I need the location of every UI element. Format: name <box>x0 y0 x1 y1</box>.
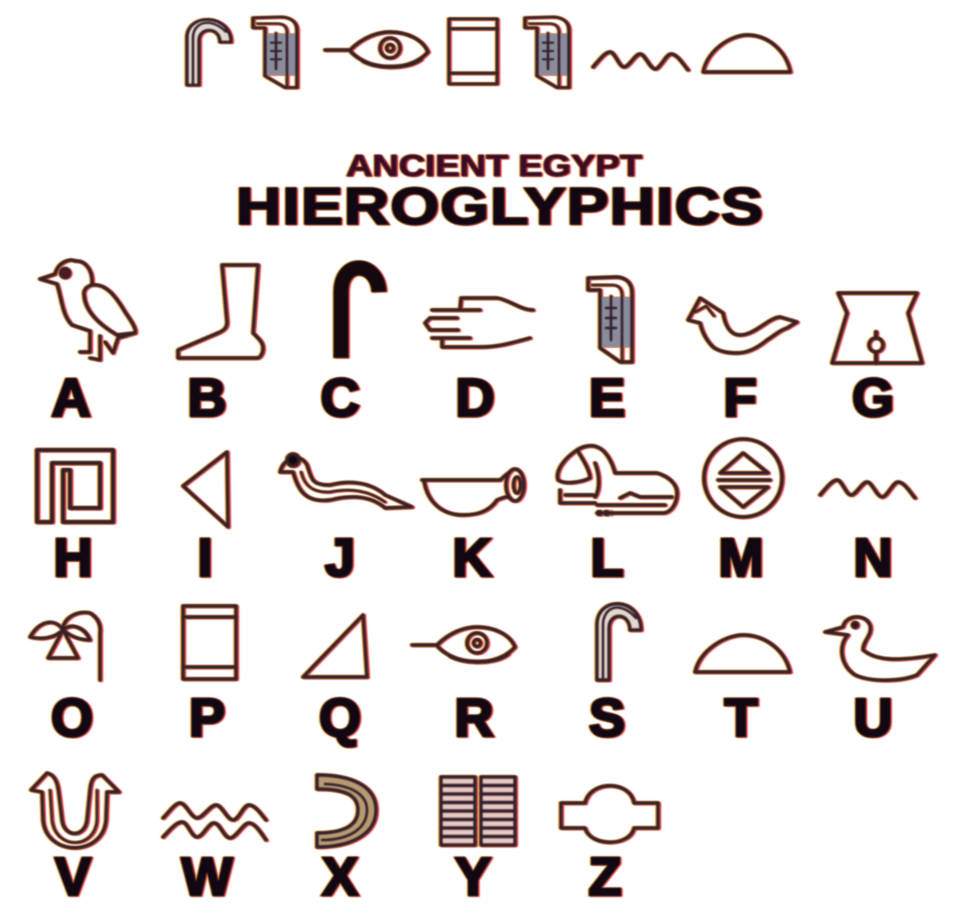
icon: top folded cloth E second <box>525 17 569 88</box>
letter J: J <box>325 528 355 588</box>
icon: water line N <box>820 480 915 498</box>
subtitle: ancient egypt: ANCIENT EGYPT <box>346 148 642 183</box>
letter M: M <box>719 528 763 588</box>
icon: circle with diamonds M <box>704 439 782 517</box>
letter A: A <box>52 368 90 428</box>
letter V: V <box>55 847 91 907</box>
letter B: B <box>188 368 226 428</box>
letter Z: Z <box>588 847 622 907</box>
title <box>236 148 764 236</box>
alphabet row 3 <box>30 604 935 748</box>
letter F: F <box>724 368 756 428</box>
icon: spiral H <box>37 450 113 522</box>
letter X: X <box>322 847 358 907</box>
icon: stand G <box>832 293 922 363</box>
letter I: I <box>197 528 213 588</box>
alphabet row 1 <box>40 260 922 428</box>
letter Y: Y <box>455 847 491 907</box>
icon: horns V <box>31 773 119 848</box>
icon: horned viper F <box>688 298 797 353</box>
icon: snake J <box>280 454 412 508</box>
heading: hieroglyphics: HIEROGLYPHICS <box>236 178 764 236</box>
letter H: H <box>54 528 92 588</box>
letter S: S <box>589 688 625 748</box>
icon: bird A <box>40 260 135 360</box>
letter O: O <box>51 688 93 748</box>
icon: palm O <box>30 612 100 680</box>
icon: top folded cloth E <box>253 17 297 88</box>
letter Q: Q <box>319 688 361 748</box>
alphabet row 4 <box>31 773 658 907</box>
letter D: D <box>456 368 494 428</box>
icon: crook S <box>597 604 641 680</box>
icon: top eye <box>325 32 428 67</box>
letter K: K <box>452 528 492 588</box>
letter C: C <box>320 368 360 428</box>
icon: foot B <box>178 265 263 358</box>
icon: basket K <box>422 469 524 515</box>
letter N: N <box>854 528 892 588</box>
letter G: G <box>852 368 894 428</box>
letter L: L <box>590 528 624 588</box>
letter T: T <box>724 688 758 748</box>
icon: dome T <box>695 635 790 672</box>
icon: top water line <box>593 52 688 70</box>
letter P: P <box>189 688 225 748</box>
top row of hieroglyphs <box>187 17 790 88</box>
icon: folded cloth E <box>588 277 632 362</box>
letter R: R <box>454 688 494 748</box>
letter U: U <box>854 688 892 748</box>
icon: double water W <box>163 803 266 840</box>
icon: lion L <box>557 446 677 513</box>
icon: duck U <box>825 617 935 680</box>
icon: bolt Z <box>561 786 658 842</box>
letter E: E <box>589 368 625 428</box>
icon: right triangle Q <box>303 615 367 677</box>
icon: top rectangle P <box>449 19 497 84</box>
icon: triangle I <box>183 452 228 527</box>
icon: crescent X <box>317 775 376 847</box>
icon: top crook S <box>187 20 231 85</box>
icon: rectangle P <box>183 606 236 679</box>
letter W: W <box>182 847 233 907</box>
alphabet row 2 <box>37 439 915 588</box>
icon: top dome <box>703 35 790 72</box>
icon: hand D <box>425 298 533 347</box>
icon: double column Y <box>441 777 515 845</box>
icon: eye R <box>412 627 515 662</box>
icon: thick crook C <box>341 268 379 358</box>
